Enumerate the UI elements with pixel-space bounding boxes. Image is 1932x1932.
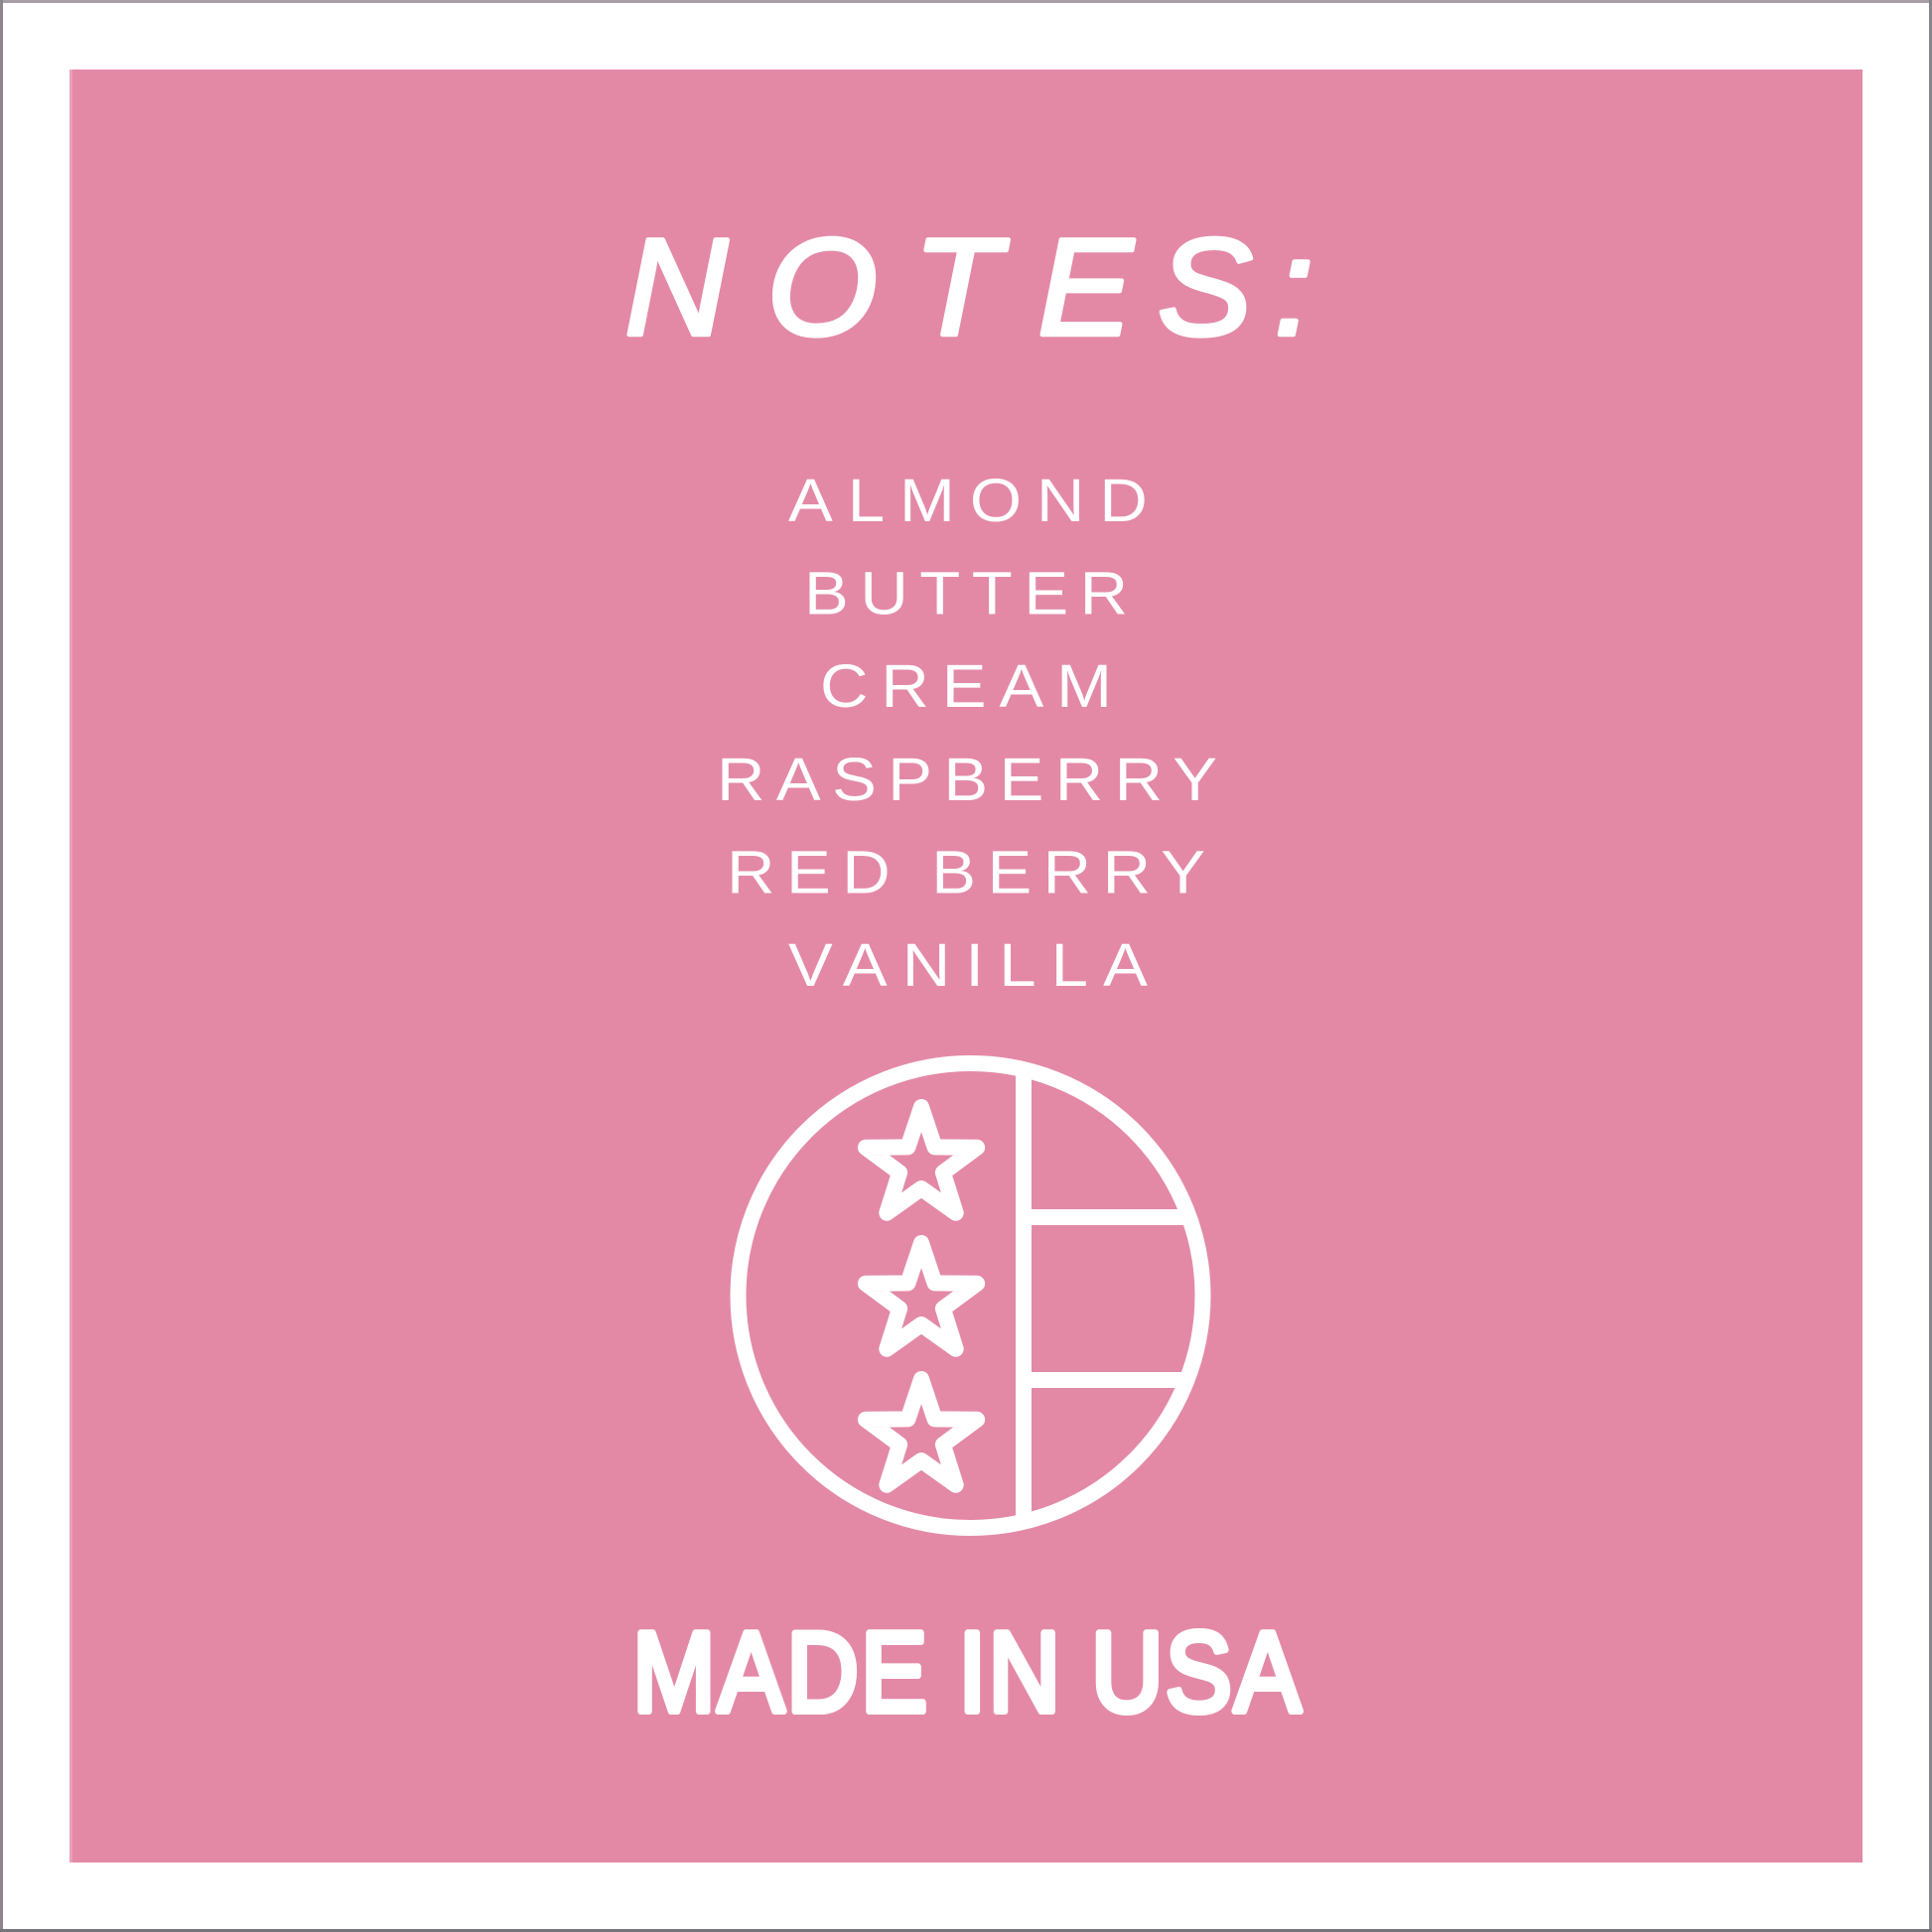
list of flavor notes xyxy=(717,467,1217,999)
label: made in USA: IN xyxy=(958,1609,1093,1735)
note: vanilla: VANILLA xyxy=(788,931,1148,999)
icon: circular USA flag badge xyxy=(739,1063,1203,1528)
icon: star top xyxy=(866,1107,977,1213)
icon: star bottom xyxy=(866,1379,977,1485)
note: red berry: RED BERRY xyxy=(727,838,1205,906)
label: made in USA: MADE xyxy=(632,1609,960,1735)
note: butter: BUTTER xyxy=(804,559,1128,627)
title: NOTES: NOTES: xyxy=(624,209,1313,364)
note: cream: CREAM xyxy=(820,652,1112,721)
label: made in USA: USA xyxy=(1091,1609,1303,1735)
icon: star middle xyxy=(866,1243,977,1349)
note: raspberry: RASPBERRY xyxy=(717,746,1217,813)
note: almond: ALMOND xyxy=(788,467,1148,534)
